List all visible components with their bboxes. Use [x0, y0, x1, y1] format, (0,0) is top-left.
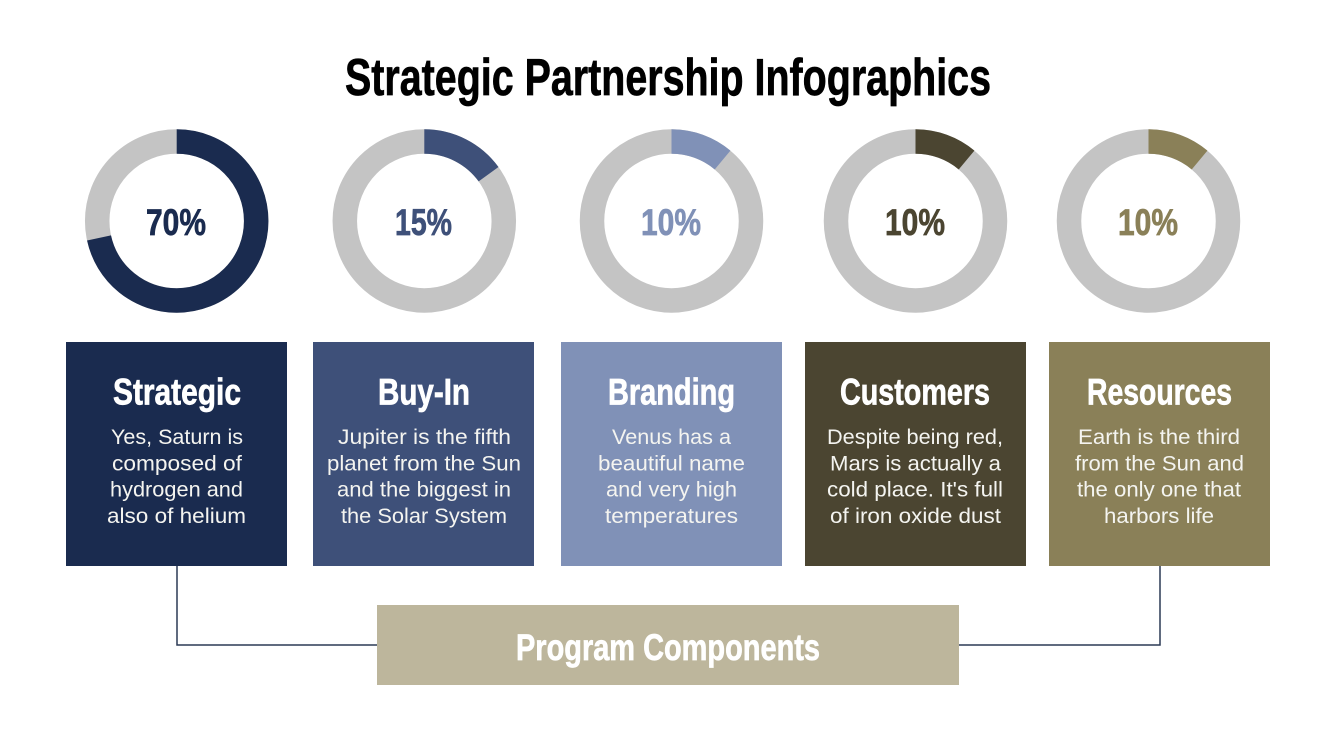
donut: Branding 10%: 10%: [641, 202, 701, 243]
panel: Resources: Resources: [1087, 372, 1232, 412]
connector: left card to program bar: [177, 566, 377, 645]
panel: Customers: [805, 342, 1026, 566]
panel: Customers: cold place. It's full: [827, 478, 1003, 502]
panel: Strategic: Strategic: [113, 372, 241, 412]
panel: Branding: beautiful name: [598, 451, 745, 475]
connector: right card to program bar: [959, 566, 1160, 645]
panel: Customers: of iron oxide dust: [830, 504, 1001, 528]
panel: Program Components: [377, 605, 959, 685]
panel: Customers: Despite being red,: [827, 425, 1003, 449]
donut: Resources 10%: [1069, 142, 1228, 300]
panel: Resources: Earth is the third: [1078, 425, 1240, 449]
panel: Buy-In: planet from the Sun: [327, 451, 521, 475]
donut: Resources 10%: 10%: [1118, 202, 1178, 243]
panel: Branding: Branding: [608, 372, 735, 412]
title: Strategic Partnership Infographics: [345, 49, 991, 107]
panel: Resources: from the Sun and: [1075, 451, 1244, 475]
panel: Branding: [561, 342, 782, 566]
donut: Customers 10%: [836, 142, 995, 300]
panel: Strategic: Yes, Saturn is: [111, 425, 243, 449]
panel: Strategic: also of helium: [107, 504, 246, 528]
panel: Strategic: hydrogen and: [110, 478, 243, 502]
panel: Strategic: composed of: [112, 451, 242, 475]
donut: Branding 10%: [592, 142, 751, 300]
donut: Buy-In 15%: [345, 142, 504, 300]
panel: Resources: the only one that: [1077, 478, 1241, 502]
donut: Strategic 70%: [97, 141, 256, 300]
panel: Branding: and very high: [606, 478, 737, 502]
panel: Buy-In: the Solar System: [341, 504, 507, 528]
panel: Resources: [1049, 342, 1270, 566]
panel: Buy-In: [313, 342, 534, 566]
panel: Buy-In: Buy-In: [378, 372, 470, 412]
panel: Strategic: [66, 342, 287, 566]
panel: Customers: Mars is actually a: [830, 451, 1001, 475]
donut: Customers 10%: 10%: [885, 202, 945, 243]
panel: Branding: Venus has a: [612, 425, 731, 449]
panel: Program Components: Program Components: [516, 627, 820, 668]
donut: Buy-In 15%: 15%: [395, 202, 452, 243]
panel: Buy-In: and the biggest in: [337, 478, 511, 502]
donut: Strategic 70%: 70%: [146, 202, 206, 243]
panel: Customers: Customers: [840, 372, 990, 412]
panel: Branding: temperatures: [605, 504, 738, 528]
panel: Resources: harbors life: [1104, 504, 1214, 528]
panel: Buy-In: Jupiter is the fifth: [338, 425, 511, 449]
